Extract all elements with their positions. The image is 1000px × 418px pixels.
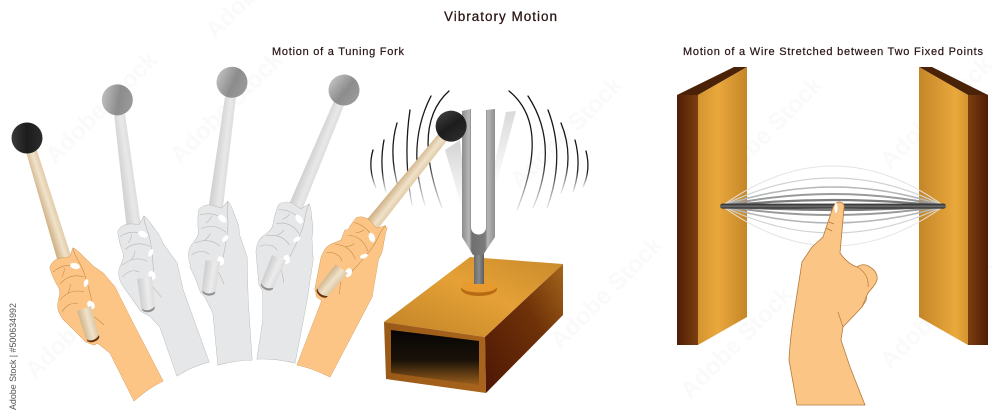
arm fill blending 2 [123, 223, 209, 376]
box top [384, 257, 563, 337]
gray hand with mallet, position 3 [132, 62, 310, 365]
box side [485, 264, 563, 393]
fist detail 4 [229, 189, 335, 300]
stem [474, 252, 484, 284]
coloured hand with mallet, left [12, 122, 163, 401]
hand shape [789, 202, 877, 405]
fist and mallet 4 [200, 68, 415, 300]
mallet 1 [12, 122, 106, 345]
gray hand with mallet, position 4 [200, 68, 415, 363]
base disk [461, 280, 497, 296]
fist detail 3 [167, 192, 258, 303]
left board front [698, 67, 747, 345]
arm fill blending 4 [257, 207, 313, 363]
resonance box [384, 257, 563, 393]
fist detail 5 [292, 207, 404, 307]
forearm 1 [72, 257, 163, 401]
forearm 4 [257, 207, 313, 363]
sound waves around fork [371, 91, 588, 210]
fist and mallet 2 [67, 82, 198, 317]
right board front [919, 67, 968, 345]
left board side [677, 95, 698, 345]
faint watermark: Adobe Stock [875, 251, 998, 374]
box opening [391, 330, 479, 385]
finger creases [826, 222, 868, 327]
box front [384, 322, 486, 393]
faint watermark: Adobe Stock [505, 71, 628, 194]
fork body [462, 109, 495, 255]
forearm 2 [123, 223, 209, 376]
left fixed board [677, 67, 747, 345]
stretched wire [720, 204, 946, 209]
faint watermark: Adobe Stock [705, 71, 828, 194]
faint watermark: Adobe Stock [875, 51, 998, 174]
vibrating wire positions [722, 166, 944, 246]
right board side [968, 95, 988, 345]
heading: stretched wire: Motion of a Wire Stretched between Two Fixed Points [683, 46, 984, 58]
tuning fork [445, 109, 516, 296]
left board top [677, 67, 747, 95]
right board top [919, 67, 988, 95]
ghost prong right [491, 111, 516, 182]
title: Vibratory Motion [444, 9, 557, 24]
gray hand with mallet, position 2 [67, 82, 209, 376]
arm fill blending 1 [72, 257, 163, 401]
fist detail 1 [50, 248, 106, 345]
fingernail [834, 203, 838, 213]
faint watermark: Adobe Stock [675, 281, 798, 404]
faint watermark: Adobe Stock [40, 46, 163, 169]
faint watermark: Adobe Stock [545, 231, 668, 354]
hand plucking wire [789, 202, 877, 405]
ghost prong left [445, 140, 467, 210]
right fixed board [919, 67, 988, 345]
heading: tuning fork: Motion of a Tuning Fork [272, 46, 404, 58]
stock image id: Adobe Stock | #500634992 [8, 303, 18, 410]
fist and mallet 3 [132, 62, 310, 303]
faint watermark: Adobe Stock [20, 261, 143, 384]
faint watermark: Adobe Stock [165, 46, 288, 169]
arm fill blending 5 [297, 228, 387, 377]
forearm 3 [190, 207, 252, 365]
fist detail 2 [105, 212, 176, 317]
fist and mallet 5 [271, 105, 508, 307]
coloured hand striking fork [271, 105, 508, 377]
arm fill blending 3 [190, 207, 252, 365]
forearm 5 [297, 228, 387, 377]
